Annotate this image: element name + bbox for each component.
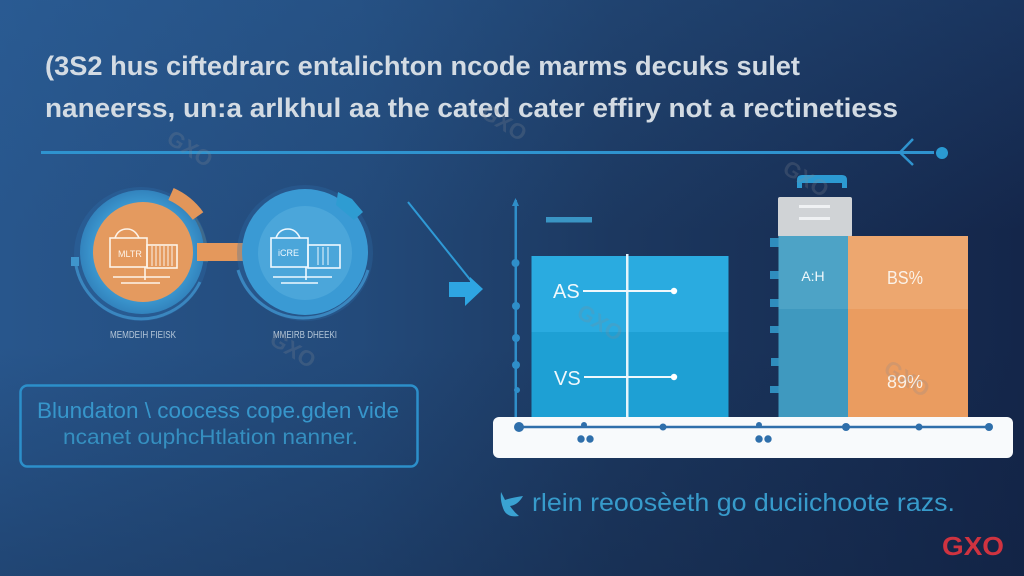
footer note: rlein reoosèeth go duciichoote razs. — [532, 489, 955, 517]
watermarks: GXO — [880, 355, 934, 402]
title: (3S2 hus ciftedrarc entalichton ncode marms decuks sulet — [45, 51, 800, 81]
legend dash — [546, 217, 592, 222]
tick marks — [770, 238, 779, 393]
y axis — [512, 198, 520, 418]
circle: orange node — [71, 187, 208, 321]
bar: orange — [848, 236, 968, 418]
icon: monitor and server: MLTR — [118, 249, 142, 259]
callout box: ncanet ouphcHtlation nanner. — [63, 426, 358, 449]
watermarks: GXO — [266, 326, 320, 373]
baseline plate — [493, 417, 1013, 458]
watermarks: GXO — [573, 299, 627, 346]
callout box — [20, 386, 418, 466]
circle caption left: MEMDEIH FIEISK — [110, 330, 176, 341]
watermarks: GXO — [779, 155, 833, 202]
title — [45, 51, 898, 123]
bar: left blue — [532, 254, 728, 418]
callout box: Blundaton \ coocess cope.gden vide — [37, 398, 399, 423]
label VS: VS — [554, 368, 581, 390]
brand mark: GXO — [942, 531, 1004, 561]
circle caption right: MMEIRB DHEEKI — [273, 330, 337, 341]
title: naneerss, un:a arlkhul aa the cated cater effiry not a rectinetiess — [45, 93, 898, 123]
header divider with arrow — [41, 139, 948, 165]
watermarks: GXO — [477, 99, 531, 146]
circle: blue node — [237, 185, 373, 321]
watermarks: GXO — [163, 125, 217, 172]
label AS: AS — [553, 281, 580, 303]
clipboard top — [778, 175, 852, 237]
watermarks — [163, 99, 934, 402]
diagonal arrow — [408, 202, 483, 306]
icon: leaf — [501, 492, 523, 516]
bar: orange: BS% — [887, 268, 923, 288]
bar: orange: 89% — [887, 372, 923, 392]
left process circles — [71, 185, 373, 341]
connector bar — [197, 243, 244, 261]
bar: teal — [778, 236, 848, 418]
bar: teal: A:H — [801, 268, 825, 284]
icon: monitor and server: iCRE — [278, 248, 299, 258]
bar chart — [493, 175, 1013, 458]
